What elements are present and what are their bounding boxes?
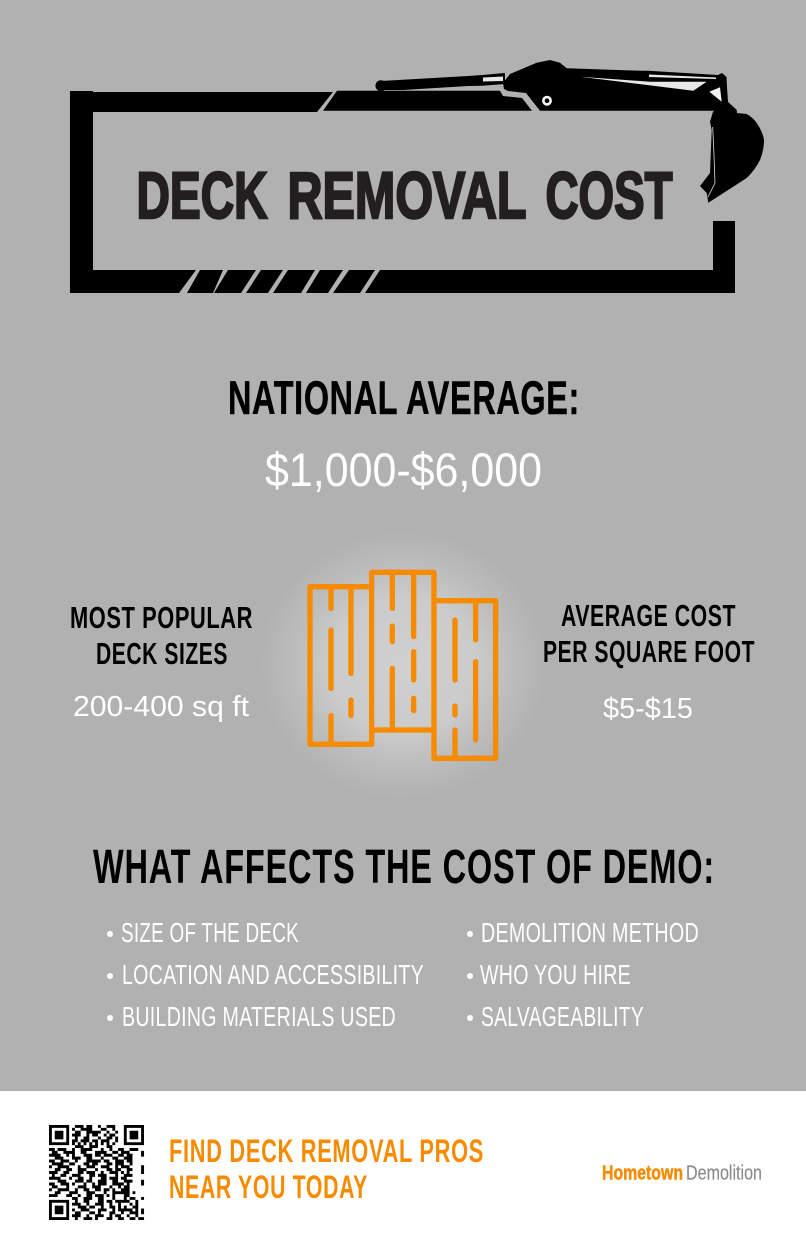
- list: cost factors right: SALVAGEABILITY: [481, 1001, 644, 1032]
- national average value: $1,000-$6,000: [265, 443, 542, 496]
- frame: hazard stripes: [187, 270, 375, 293]
- title: COST: [546, 158, 672, 232]
- logo: Hometown Demolition: Demolition: [686, 1162, 762, 1184]
- frame: bottom bar and right post: [365, 221, 735, 293]
- frame: top bar right section: [323, 91, 532, 111]
- list: cost factors left: SIZE OF THE DECK: [121, 917, 299, 948]
- list: cost factors left: LOCATION AND ACCESSIBILITY: [122, 959, 424, 990]
- frame: left and top bars: [70, 91, 333, 293]
- logo: Hometown Demolition: [602, 1162, 762, 1184]
- list: cost factors right: DEMOLITION METHOD: [481, 917, 699, 948]
- excavator bucket: [700, 102, 764, 203]
- list: cost factors left: BUILDING MATERIALS USED: [122, 1001, 396, 1032]
- title: [136, 158, 672, 232]
- title: REMOVAL: [288, 158, 526, 232]
- title: DECK: [136, 158, 268, 232]
- call to action: FIND DECK REMOVAL PROS: [169, 1133, 484, 1169]
- list: cost factors right: WHO YOU HIRE: [480, 959, 631, 990]
- excavator arm: [376, 60, 737, 111]
- QR code: [49, 1126, 143, 1220]
- stat: most popular deck sizes: MOST POPULAR: [70, 600, 253, 635]
- stat: most popular deck sizes: 200-400 sq ft: [73, 691, 249, 723]
- list: cost factors right: [467, 917, 699, 1032]
- heading: national average: NATIONAL AVERAGE:: [228, 371, 580, 424]
- title frame with excavator: [70, 60, 764, 293]
- stat: most popular deck sizes: [70, 600, 253, 723]
- stat: average cost per square foot: $5-$15: [603, 693, 693, 725]
- stat: most popular deck sizes: DECK SIZES: [96, 636, 228, 671]
- list: cost factors left: [107, 917, 424, 1032]
- logo: Hometown Demolition: Hometown: [602, 1162, 683, 1184]
- icon: wood planks: [310, 572, 496, 758]
- call to action: [169, 1133, 484, 1205]
- icon: glow behind wood planks: [258, 530, 548, 800]
- footer band: [0, 1091, 806, 1252]
- stat: average cost per square foot: [543, 598, 755, 725]
- call to action: NEAR YOU TODAY: [169, 1169, 368, 1205]
